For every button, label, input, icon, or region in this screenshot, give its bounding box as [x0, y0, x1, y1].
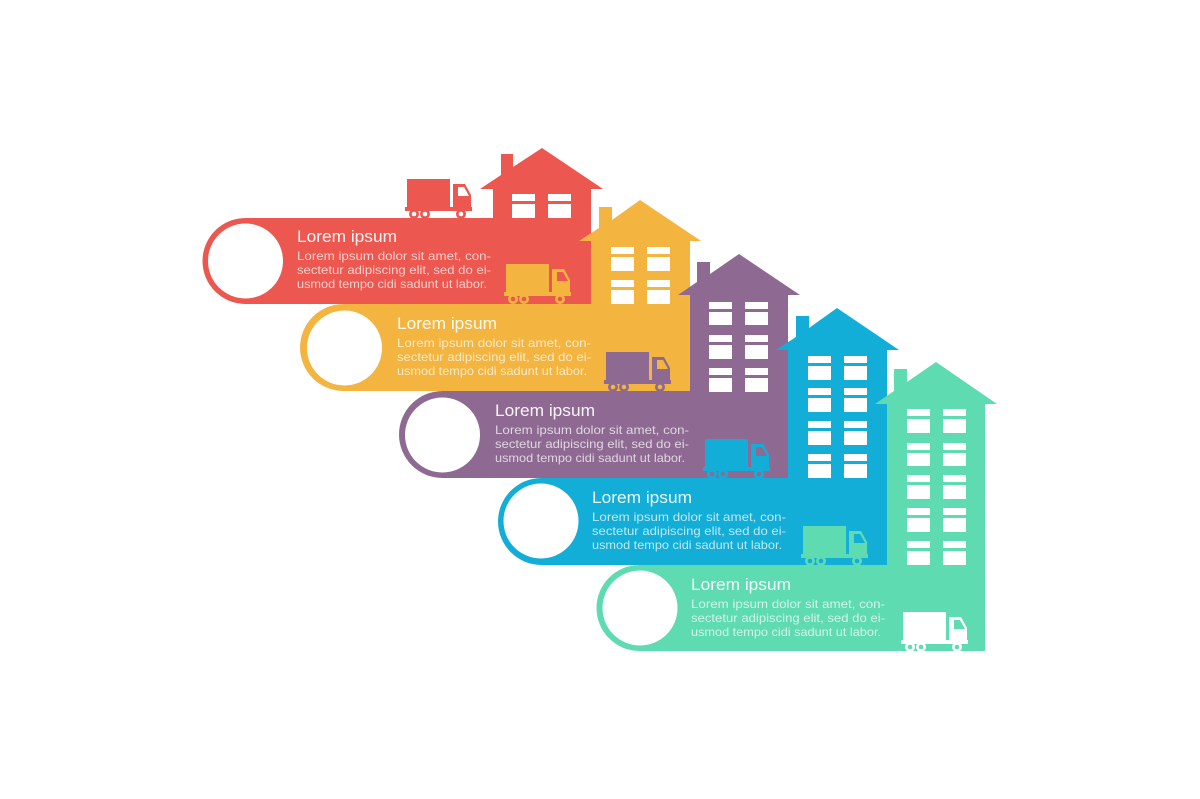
yellow body text: sectetur adipiscing elit, sed do ei- [397, 350, 591, 364]
purple heading: Lorem ipsum [495, 401, 595, 420]
panel: green step [596, 362, 997, 652]
blue body text [592, 510, 786, 552]
purple body text: usmod tempo cidi sadunt ut labor. [495, 451, 685, 465]
icon: white truck [901, 612, 968, 652]
green body text: sectetur adipiscing elit, sed do ei- [691, 611, 885, 625]
panel: blue step [498, 308, 899, 565]
yellow heading: Lorem ipsum [397, 314, 497, 333]
green heading: Lorem ipsum [691, 575, 791, 594]
red body text: usmod tempo cidi sadunt ut labor. [297, 277, 487, 291]
yellow band and house [300, 200, 701, 391]
blue band and house [498, 308, 899, 565]
icon: yellow truck [504, 264, 571, 304]
purple circle placeholder [405, 398, 480, 472]
blue heading: Lorem ipsum [592, 488, 692, 507]
green band and house [596, 362, 997, 651]
red body text: sectetur adipiscing elit, sed do ei- [297, 263, 491, 277]
green house windows [907, 409, 966, 565]
yellow circle placeholder [307, 310, 382, 386]
blue circle placeholder [504, 484, 578, 558]
blue body text: sectetur adipiscing elit, sed do ei- [592, 524, 786, 538]
yellow body text: Lorem ipsum dolor sit amet, con- [397, 336, 591, 350]
panel: yellow step [300, 200, 701, 391]
red body text: Lorem ipsum dolor sit amet, con- [297, 249, 491, 263]
icon: green truck on blue step [801, 526, 868, 566]
red house windows [512, 194, 571, 218]
yellow body text [397, 336, 591, 378]
yellow house windows [611, 247, 670, 304]
icon: red truck [405, 179, 472, 219]
blue body text: Lorem ipsum dolor sit amet, con- [592, 510, 786, 524]
purple body text: sectetur adipiscing elit, sed do ei- [495, 437, 689, 451]
green circle placeholder [602, 570, 678, 646]
green body text [691, 597, 885, 639]
icon: blue truck [703, 439, 770, 479]
panel: purple step [399, 254, 800, 478]
purple house windows [709, 302, 768, 392]
panel: red step [202, 148, 603, 304]
red circle placeholder [208, 224, 283, 298]
green body text: usmod tempo cidi sadunt ut labor. [691, 625, 881, 639]
red body text [297, 249, 491, 291]
blue body text: usmod tempo cidi sadunt ut labor. [592, 538, 782, 552]
purple band and house [399, 254, 800, 478]
purple body text: Lorem ipsum dolor sit amet, con- [495, 423, 689, 437]
purple body text [495, 423, 689, 465]
red band and house [202, 148, 603, 304]
blue house windows [808, 356, 867, 478]
icon: purple truck [604, 352, 671, 392]
yellow body text: usmod tempo cidi sadunt ut labor. [397, 364, 587, 378]
red heading: Lorem ipsum [297, 227, 397, 246]
green body text: Lorem ipsum dolor sit amet, con- [691, 597, 885, 611]
